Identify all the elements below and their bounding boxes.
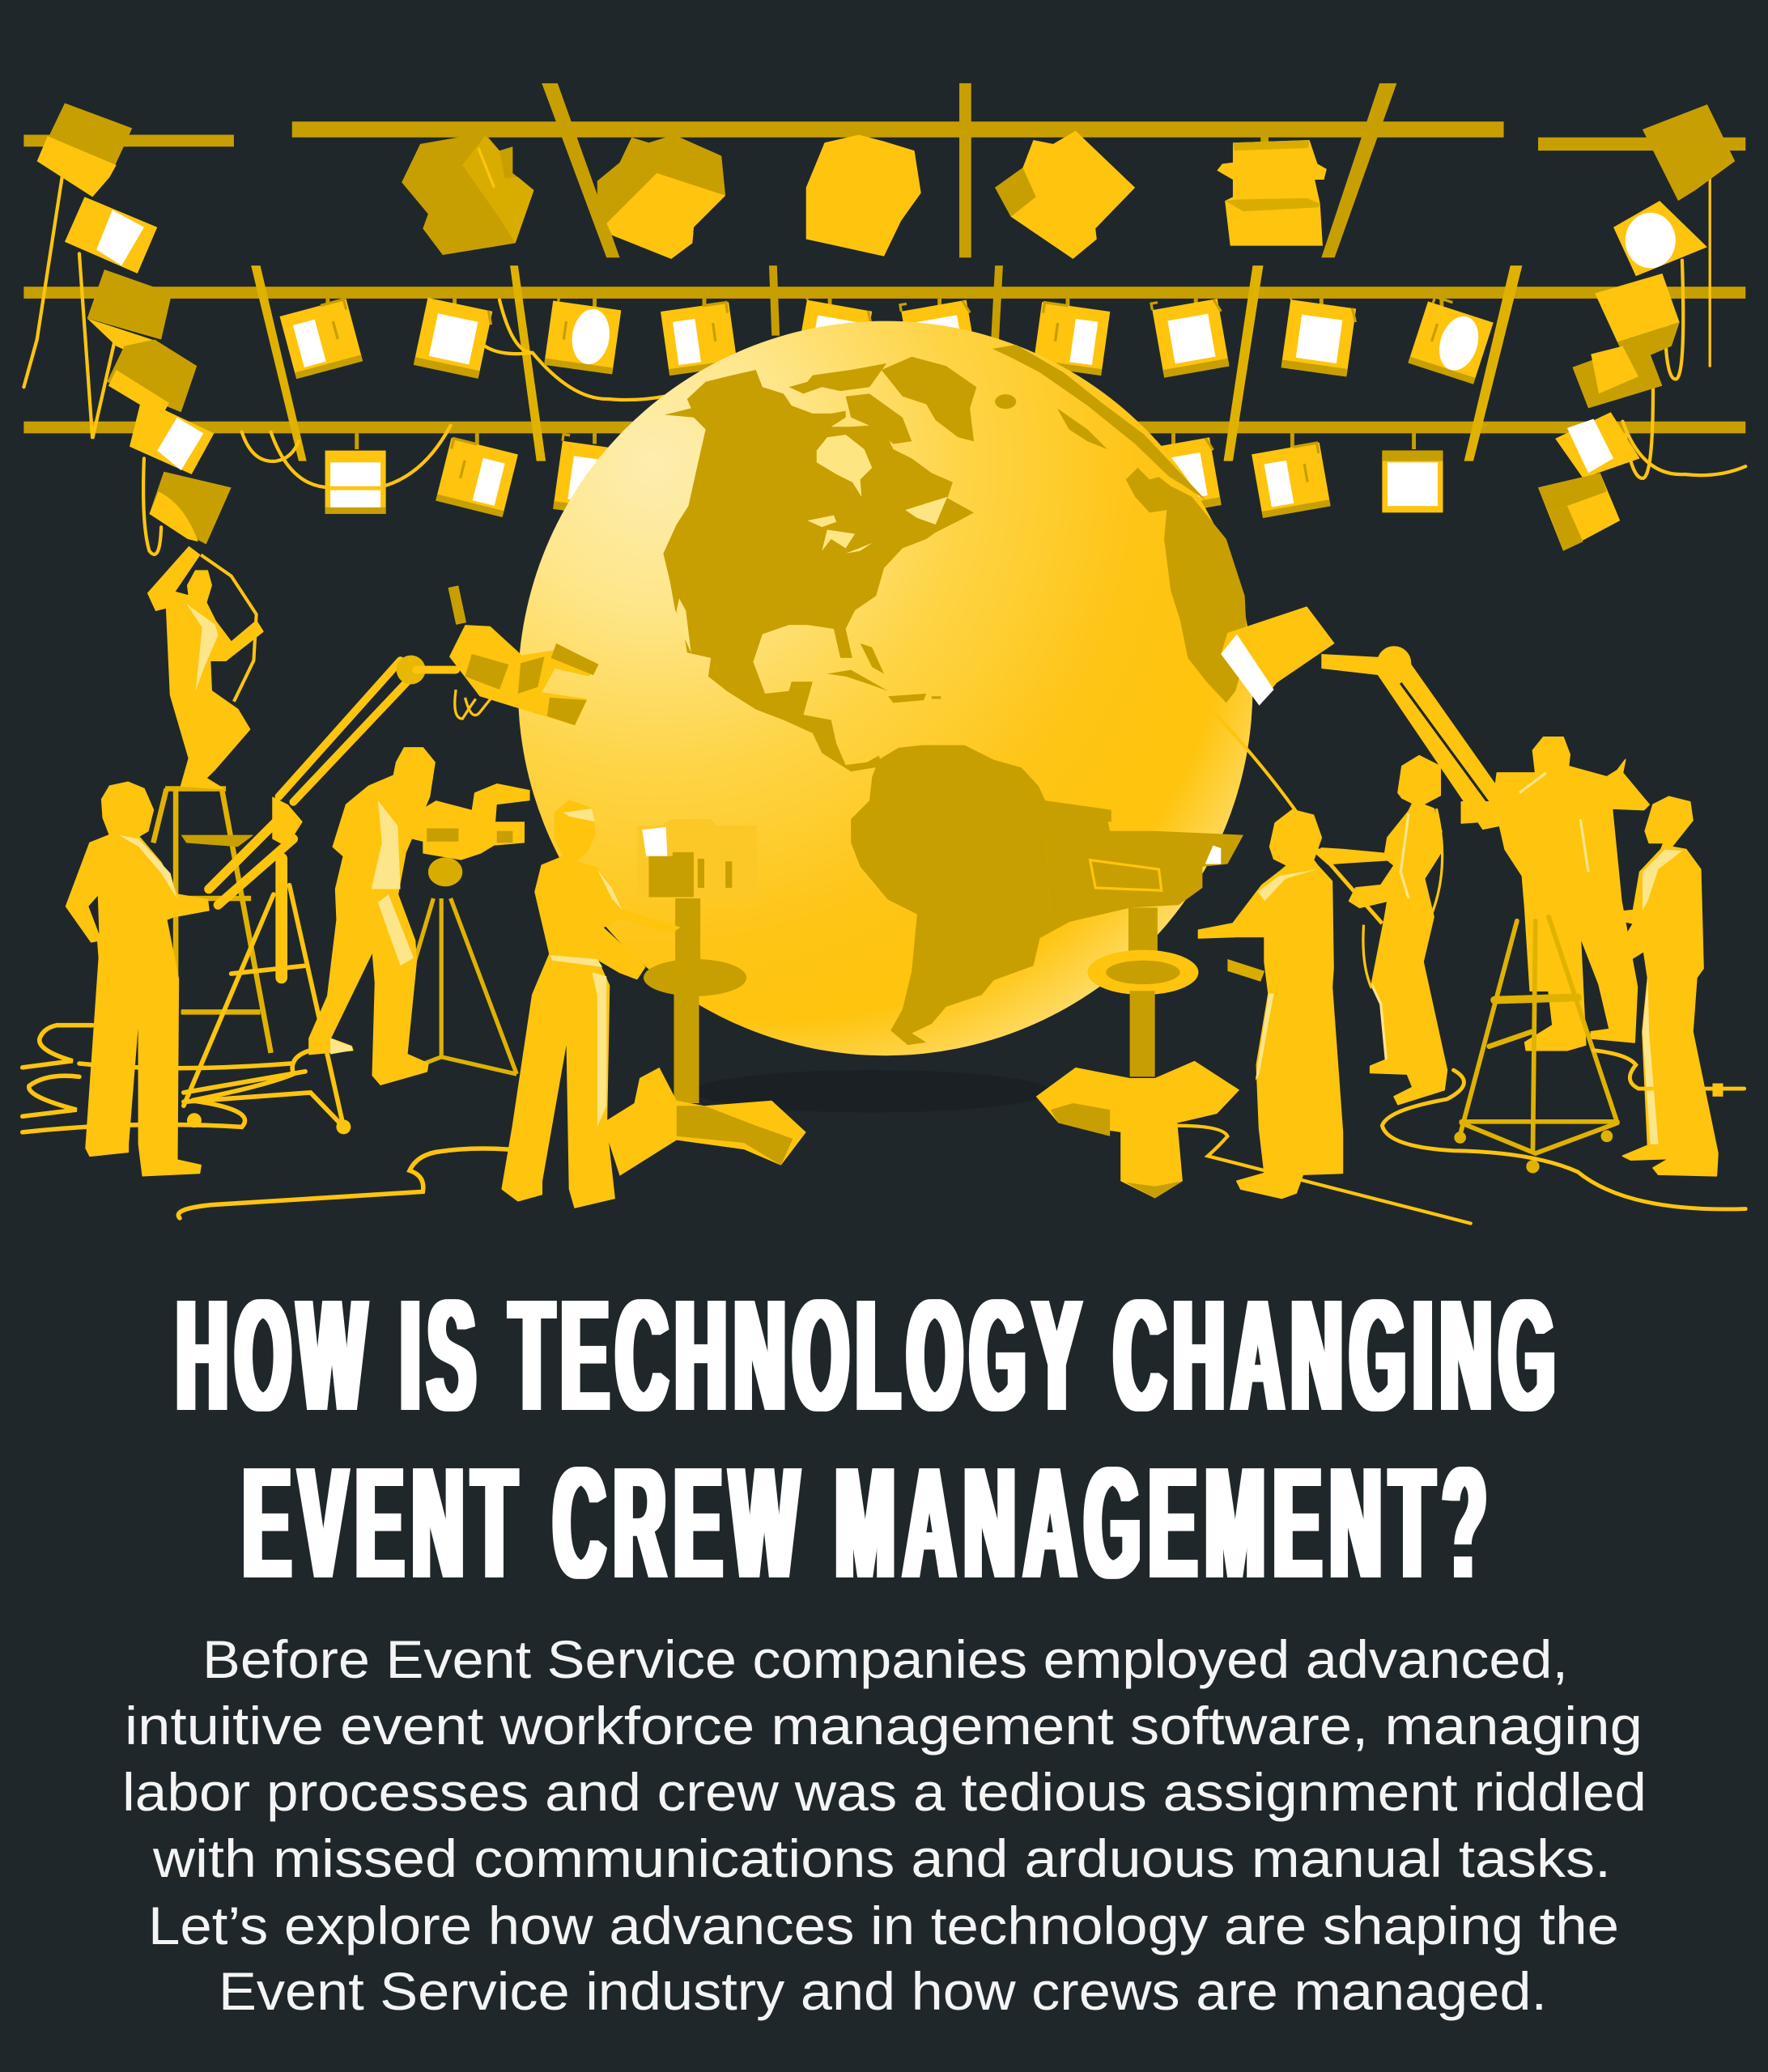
- large lamp 3: [806, 134, 921, 257]
- europe and asia rim: [992, 345, 1206, 501]
- person: operator with camera right: [1198, 810, 1342, 1198]
- large lamp 5: [1217, 132, 1327, 246]
- greenland: [882, 357, 976, 441]
- camera on tripod left: [379, 783, 530, 1081]
- iceland: [995, 394, 1016, 409]
- illustration: film crew lighting a globe: [23, 83, 1745, 1224]
- icon: right lamp stack: [1538, 104, 1735, 551]
- person: woman with cable: [1316, 756, 1447, 1105]
- intro text block: Event Service industry and how crews are managed.: [219, 1961, 1547, 2021]
- rig cables: [23, 168, 1745, 554]
- south america: [851, 745, 1111, 1045]
- intro text block: Before Event Service companies employed advanced,: [202, 1629, 1568, 1689]
- person: man with raised arm: [1461, 737, 1649, 1051]
- pedestal camera left: [602, 819, 806, 1176]
- title: [176, 1267, 1555, 1612]
- arctic islands: [788, 363, 886, 393]
- person: woman at left camera: [502, 800, 679, 1208]
- person: man at far right: [1605, 796, 1718, 1176]
- north america: [663, 370, 974, 771]
- title line 2: EVENT CREW MANAGEMENT?: [243, 1434, 1486, 1612]
- person on ladder: [148, 547, 263, 788]
- africa: [1126, 468, 1247, 703]
- cables floor left: [23, 1025, 508, 1218]
- icon: large back-row lamps: [402, 131, 1327, 259]
- pedestal camera right: [1036, 819, 1243, 1198]
- caribbean: [827, 643, 941, 703]
- great lakes: [807, 497, 947, 554]
- icon: left lamp stack: [37, 103, 232, 545]
- intro text block: intuitive event workforce management software, managing: [125, 1696, 1643, 1756]
- boom light right: [1221, 606, 1522, 830]
- icon: lamps row 3: [325, 431, 1443, 518]
- title line 1: HOW IS TECHNOLOGY CHANGING: [176, 1267, 1555, 1445]
- boom arm left: [209, 656, 456, 905]
- stepladder: [153, 788, 271, 1053]
- globe: [518, 321, 1252, 1055]
- boom stand: [184, 859, 351, 1134]
- intro text block: Let’s explore how advances in technology are shaping the: [148, 1896, 1619, 1955]
- large lamp 4: [995, 131, 1135, 259]
- intro text block: with missed communications and arduous manual tasks.: [152, 1828, 1611, 1888]
- boom camera left: [449, 587, 598, 725]
- large lamp 2: [597, 134, 725, 259]
- hudson bay: [817, 435, 872, 497]
- icon: lamps row 2: [280, 291, 1495, 384]
- tripod right: [1454, 917, 1617, 1173]
- large lamp 1: [402, 134, 533, 255]
- intro text block: labor processes and crew was a tedious assignment riddled: [122, 1762, 1647, 1822]
- person: man at front left: [66, 782, 209, 1176]
- baja sliver: [677, 598, 691, 652]
- person: cameraman left: [309, 748, 435, 1085]
- lighting rig rails: [23, 83, 1745, 461]
- cable from boom light: [1189, 687, 1302, 819]
- cables floor right: [1177, 1051, 1745, 1224]
- intro text block: [122, 1629, 1647, 2021]
- shadow under globe: [694, 1070, 1051, 1112]
